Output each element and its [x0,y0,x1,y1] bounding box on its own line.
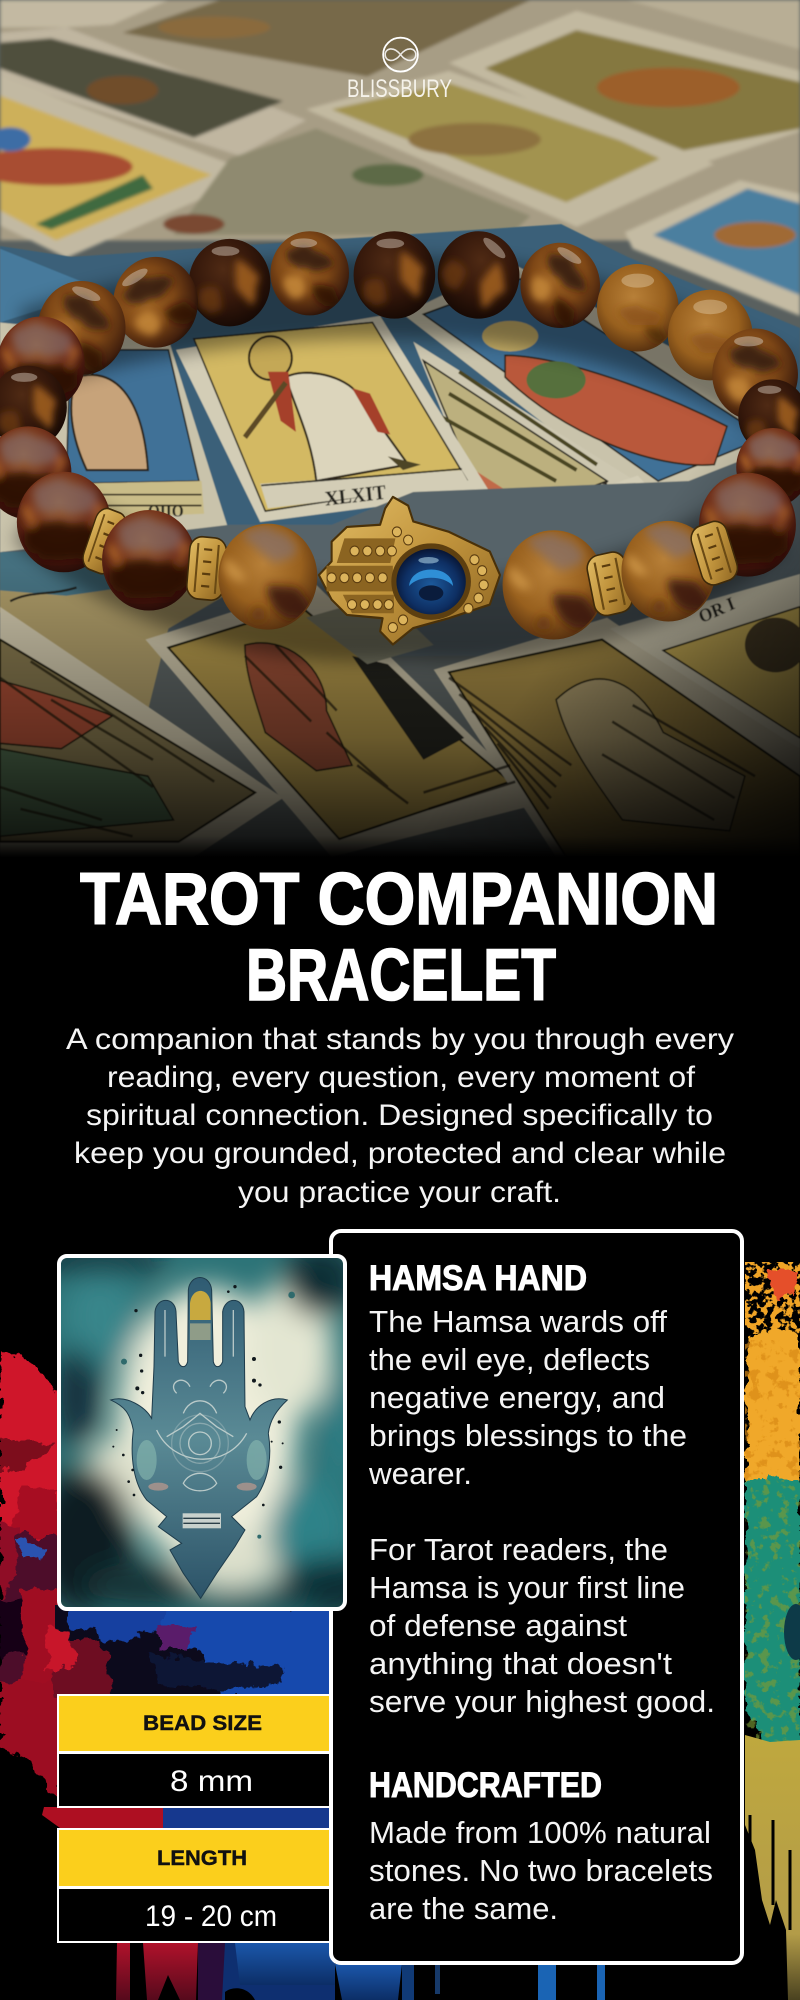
intro paragraph: you practice your craft. [238,1176,561,1209]
text block: hamsa description: of defense against [369,1608,627,1643]
panel: hamsa hand and handcrafted text [331,1231,742,1963]
spec table: length [58,1829,338,1942]
spec table: bead size: BEAD SIZE [143,1712,262,1735]
title: BRACELET [246,935,556,1016]
bottom drips [116,1943,130,2000]
hamsa artwork panel [57,1254,347,1611]
intro paragraph: keep you grounded, protected and clear while [74,1137,726,1170]
logo wordmark: BLISSBURY [347,75,452,103]
bracelet beads [0,213,800,640]
hand silhouette [111,1277,287,1598]
intro paragraph [66,1023,734,1209]
text block: hamsa description: the evil eye, deflects [369,1342,650,1377]
middle tarot cards: OIIO [148,503,184,521]
spec table: length: 19 - 20 cm [145,1900,277,1933]
text block: hamsa description: negative energy, and [369,1380,665,1415]
text block: hamsa description: serve your highest good. [369,1684,715,1719]
text block: hamsa description: wearer. [368,1456,472,1491]
band under image [55,1605,335,1697]
intro paragraph: A companion that stands by you through every [66,1023,734,1056]
text block: handcrafted description: Made from 100% natural [369,1815,711,1850]
title: TAROT COMPANION [80,859,718,940]
foreground tarot cards [0,574,800,857]
text block: hamsa description [368,1304,715,1719]
text block: hamsa description: Hamsa is your first line [369,1570,685,1605]
text block: hamsa description: The Hamsa wards off [369,1304,667,1339]
text block: hamsa description: anything that doesn't [369,1646,672,1681]
intro paragraph: spiritual connection. Designed specifically to [86,1099,713,1132]
bracelet shadow [31,298,776,620]
paint splash: right orange and green [745,1262,800,2000]
middle tarot cards [0,224,800,711]
intro paragraph: reading, every question, every moment of [107,1061,696,1094]
hamsa charm [319,497,500,644]
paint splash: left red and blue [0,1350,605,2000]
spec table: bead size [58,1695,338,1807]
heading: hamsa hand: HAMSA HAND [369,1259,587,1298]
blurred rear tarot cards [0,0,800,316]
text block: handcrafted description: are the same. [369,1891,558,1926]
hero photo: bracelet on tarot cards [0,0,800,857]
middle tarot cards: IIIOIIMIIIMIII [492,478,614,543]
text block: handcrafted description: stones. No two bracelets [369,1853,713,1888]
text block: handcrafted description [369,1815,713,1926]
middle tarot cards: XLXIT [324,481,388,511]
gap between spec tables [42,1807,166,1829]
photo vignette [0,591,800,857]
text block: hamsa description: For Tarot readers, the [369,1532,668,1567]
foreground tarot cards: OR I [696,593,737,627]
spec table: bead size: 8 mm [170,1765,253,1798]
logo: infinity mark [383,38,418,72]
ink specks [112,1285,284,1506]
text block: hamsa description: brings blessings to the [369,1418,687,1453]
spec table: length: LENGTH [157,1847,247,1870]
heading: handcrafted: HANDCRAFTED [369,1766,602,1805]
title [80,859,718,1016]
